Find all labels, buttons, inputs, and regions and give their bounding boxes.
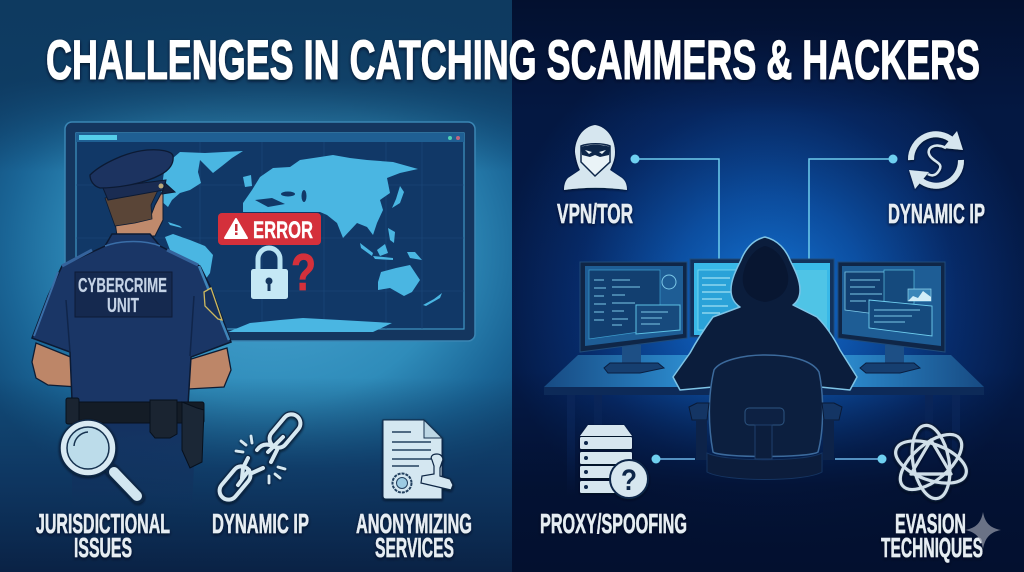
label: anonymizing services: SERVICES [375, 532, 454, 563]
shirt trim and shoulder straps [34, 242, 229, 356]
back patch [75, 272, 172, 317]
chain links [216, 411, 304, 503]
back patch: UNIT [107, 295, 139, 317]
error badge: ERROR [253, 217, 313, 244]
icon: server with question mark: ? [621, 464, 637, 497]
duty belt [66, 398, 204, 468]
seas [255, 190, 306, 207]
desk [544, 355, 984, 495]
officer trousers [72, 420, 196, 510]
icon: server with question mark [580, 425, 648, 498]
left computer monitor [580, 262, 687, 373]
chain sparks [236, 436, 285, 483]
knot strands [890, 422, 972, 502]
label: evasion techniques [881, 508, 983, 563]
panel: police side background [0, 0, 512, 572]
back patch: CYBERCRIME [78, 275, 167, 297]
hacker in hoodie [673, 237, 857, 390]
office chair [689, 355, 842, 480]
label: jurisdictional issues: ISSUES [74, 532, 132, 563]
icon: rotating dynamic ip arrows [909, 131, 963, 189]
chain outline [216, 411, 304, 503]
label: jurisdictional issues: JURISDICTIONAL [36, 508, 170, 539]
error badge [218, 213, 321, 245]
officer arms [32, 343, 231, 389]
sparkle watermark [965, 512, 1001, 549]
label: vpn/tor: VPN/TOR [557, 198, 633, 229]
wall monitor with world map [65, 122, 475, 341]
icon: padlock [251, 248, 288, 299]
shoulder badge [204, 288, 222, 320]
connector: evasion to hacker [835, 454, 886, 464]
connector: dynamic ip to monitor [809, 154, 898, 259]
label: proxy/spoofing: PROXY/SPOOFING [540, 508, 687, 539]
connector: vpn/tor to monitor [630, 154, 719, 259]
icon: broken chain [216, 411, 304, 503]
centre computer monitor [690, 259, 834, 337]
world map [160, 151, 442, 332]
label: evasion techniques: EVASION [895, 508, 966, 539]
right computer monitor [838, 262, 945, 373]
label: jurisdictional issues [36, 508, 170, 563]
police officer [32, 150, 231, 510]
panel: hacker side background [512, 0, 1024, 572]
icon: document with stamp [383, 420, 453, 499]
icon: hooded masked figure [564, 125, 627, 190]
officer cap [90, 150, 175, 200]
officer neck and head [105, 190, 163, 236]
label: anonymizing services: ANONYMIZING [356, 508, 472, 539]
officer shirt [32, 234, 231, 412]
label: anonymizing services [356, 508, 472, 563]
connector: proxy to hacker [652, 454, 695, 464]
icon: magnifying glass [60, 420, 138, 497]
icon: tangled knot [890, 422, 972, 502]
icon: red question mark: ? [291, 244, 316, 302]
knot outline [890, 422, 972, 502]
map grid [76, 142, 464, 329]
label: dynamic ip left: DYNAMIC IP [212, 508, 309, 539]
